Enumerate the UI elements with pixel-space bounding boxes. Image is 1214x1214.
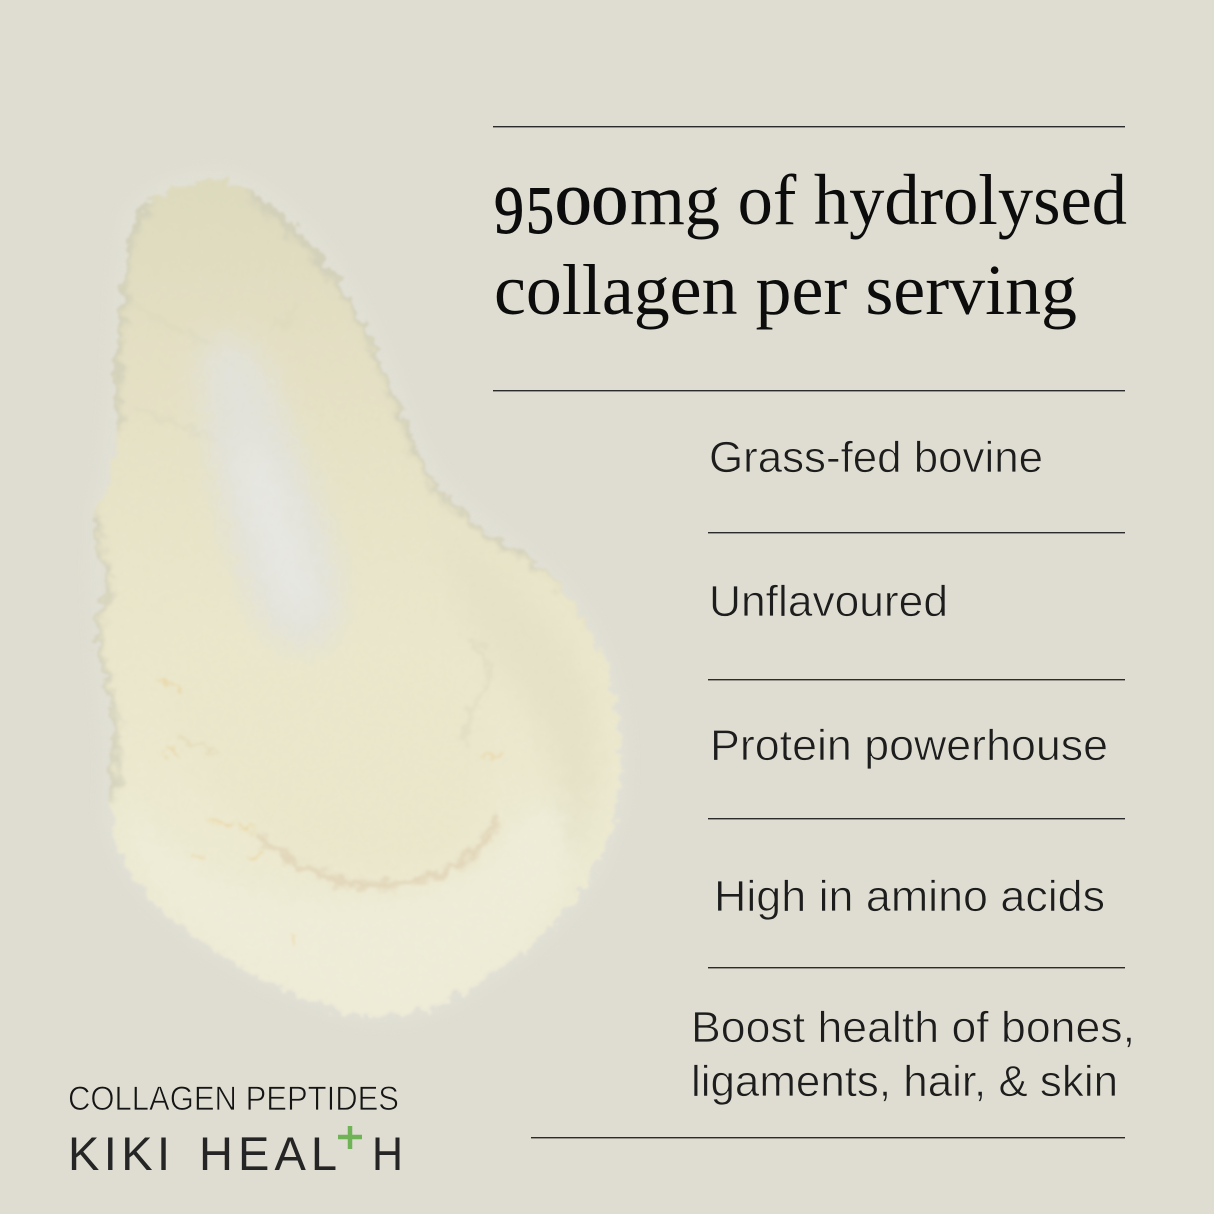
top divider [493,126,1125,127]
powder centre smooth [160,620,487,876]
title line 1: 5 [526,172,554,248]
powder white hollow glow [202,336,340,648]
feature: grass-fed bovine: Grass-fed bovine [709,433,1043,482]
title line 1: 9 [494,172,524,248]
feature: high in amino acids: High in amino acids [714,872,1105,921]
powder halo [88,169,630,1025]
powder outer mound [93,180,621,1017]
title line 2: collagen per serving [494,250,1077,330]
title line 1: 00 [555,176,628,236]
product label: COLLAGEN PEPTIDES [68,1080,399,1118]
powder grey edge shadow [93,190,595,800]
powder white hollow core [239,438,316,622]
icon: green plus [338,1126,362,1149]
powder swatch [85,169,635,1030]
brand wordmark kiki: KIKI [68,1127,170,1180]
powder yellow flecks [160,680,500,945]
feature line 2: ligaments, hair, & skin [691,1057,1118,1106]
feature: protein powerhouse: Protein powerhouse [710,721,1108,770]
powder faint folds [125,300,489,745]
powder texture [85,170,635,1030]
title [494,160,1127,330]
powder right shaded flank [560,781,594,835]
title divider [493,390,1125,391]
feature: boost health [691,1003,1135,1106]
brand logo [68,1126,403,1180]
feature line 1: Boost health of bones, [691,1003,1135,1052]
brand wordmark h: H [372,1127,403,1180]
powder lower bright rim [125,790,590,1011]
powder body [85,170,635,1030]
feature: unflavoured: Unflavoured [709,577,948,626]
powder tan crease [255,815,498,886]
brand wordmark heal: HEAL [199,1127,337,1180]
title line 1: mg of hydrolysed [630,160,1127,240]
